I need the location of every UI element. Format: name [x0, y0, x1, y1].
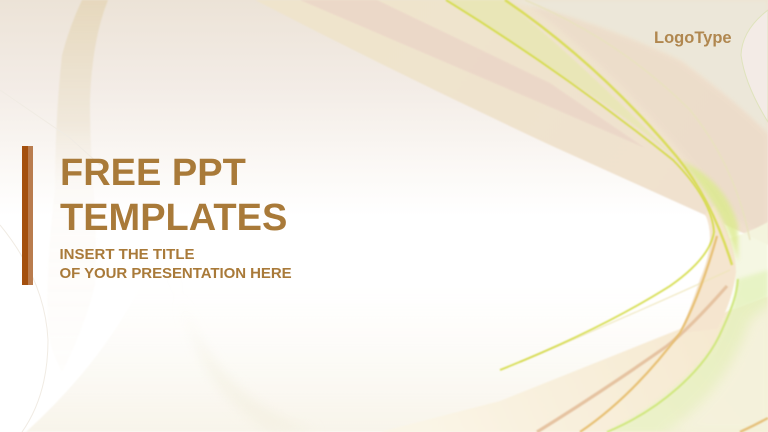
- lower-right pale mass: [380, 296, 768, 432]
- title: TEMPLATES: [60, 197, 287, 239]
- accent bar: [22, 146, 33, 285]
- pale top-right cream: [505, 0, 768, 135]
- yellow-green main stroke with thin green line: [446, 0, 714, 370]
- lime glow: [680, 160, 738, 262]
- pale light stroke: [525, 0, 750, 240]
- subtitle: OF YOUR PRESENTATION HERE: [60, 265, 292, 282]
- title: FREE PPT: [60, 152, 246, 194]
- orange corner stroke: [740, 418, 768, 432]
- thin pale line: [520, 270, 730, 362]
- pale band lower centre: [172, 270, 318, 432]
- pale band left: [47, 0, 108, 372]
- upper-right clear lobe: [741, 10, 768, 122]
- green edge: [607, 279, 738, 432]
- pink ribbon right: [530, 6, 768, 240]
- yellow-green ribbon: [445, 0, 682, 165]
- tan diagonal ribbon: [537, 286, 727, 432]
- pale wedge right of the bulge: [725, 222, 768, 308]
- green region lower right: [607, 270, 768, 432]
- subtitle: [60, 246, 292, 282]
- faint curve upper left: [0, 90, 100, 432]
- cream over green: [660, 300, 768, 432]
- logo text: LogoType: [654, 29, 732, 47]
- subtitle: INSERT THE TITLE: [60, 246, 194, 263]
- title: [60, 152, 287, 239]
- cream lower sweep: [26, 280, 768, 432]
- pink ribbon: [300, 0, 645, 148]
- peach curve panel: [680, 205, 736, 333]
- orange curve: [580, 236, 717, 432]
- yellow-green second stroke: [505, 0, 732, 265]
- main upper sweep base: [255, 0, 768, 245]
